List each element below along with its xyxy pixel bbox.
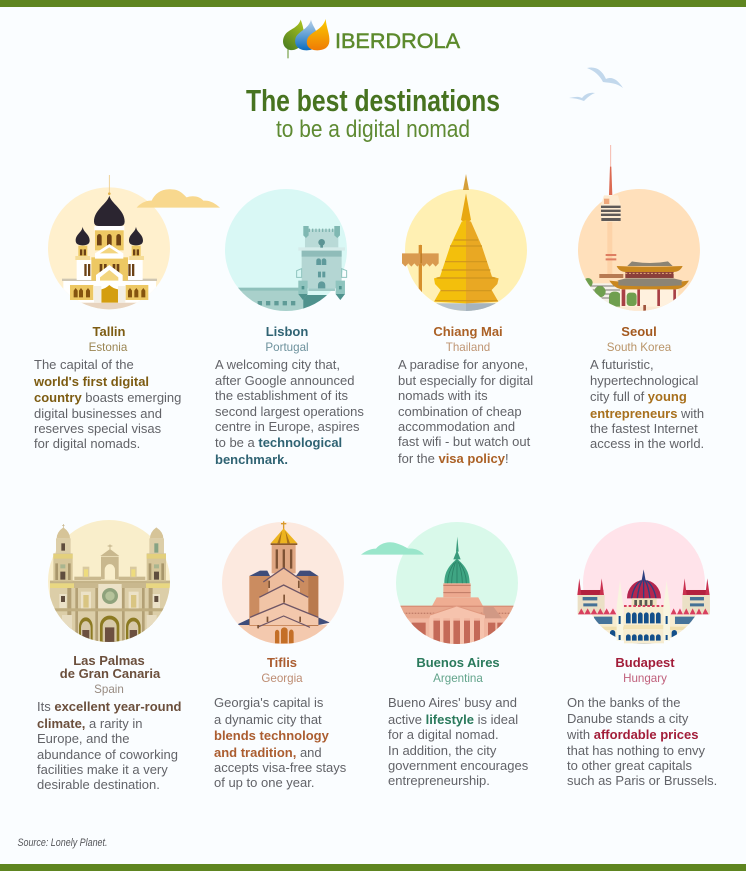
panel: Las Palmas [37, 520, 182, 792]
icon: birds [569, 67, 623, 101]
description: and tradition, [214, 745, 296, 760]
panel: Budapest [566, 522, 717, 788]
description: In addition, the city [388, 743, 497, 758]
logo: Iberdrola [283, 19, 460, 58]
description: young [648, 389, 687, 404]
description: to other great capitals [567, 758, 693, 773]
panel: Chiang Mai [398, 174, 533, 466]
description: Its [37, 699, 54, 714]
description: entrepreneurship. [388, 773, 490, 788]
illustration: Santa Ana cathedral [48, 520, 170, 644]
panel: Seoul [578, 145, 704, 451]
description: Georgia's capital is [214, 695, 324, 710]
description: climate, [37, 716, 85, 731]
description: that has nothing to envy [567, 743, 706, 758]
description: digital businesses and [34, 406, 162, 421]
description: of up to one year. [214, 775, 314, 790]
description: facilities make it a very [37, 762, 168, 777]
country: Thailand [446, 341, 490, 354]
illustration: Belem tower [225, 189, 347, 313]
city name line 2: de Gran Canaria [60, 666, 161, 681]
illustration: N Seoul Tower and temple [578, 145, 700, 312]
description: A paradise for anyone, [398, 357, 528, 372]
description: after Google announced [215, 373, 354, 388]
description: Danube stands a city [567, 711, 689, 726]
description: hypertechnological [590, 373, 699, 388]
description: a dynamic city that [214, 712, 322, 727]
description: boasts emerging [82, 390, 181, 405]
description: A futuristic, [590, 357, 654, 372]
panel: Buenos Aires [361, 522, 529, 788]
description: lifestyle is ideal [426, 712, 518, 727]
panel: Tiflis [214, 521, 347, 790]
description: for a digital nomad. [388, 727, 499, 742]
description: but especially for digital [398, 373, 533, 388]
illustration: National Congress [396, 522, 518, 645]
title [246, 83, 500, 143]
description: such as Paris or Brussels. [567, 773, 717, 788]
description: combination of cheap [398, 404, 522, 419]
description: desirable destination. [37, 777, 160, 792]
description: blends technology [214, 728, 330, 743]
description: technological [258, 435, 342, 450]
illustration: Hungarian Parliament [577, 522, 710, 645]
icon: green cloud [361, 542, 424, 555]
description: the establishment of its [215, 388, 348, 403]
city name: Budapest [615, 655, 675, 670]
city name: Chiang Mai [433, 324, 503, 339]
city name: Seoul [621, 324, 657, 339]
description: world's first digital [33, 374, 149, 389]
city name: Buenos Aires [416, 655, 500, 670]
description: and [296, 745, 322, 760]
icon: three leaves [283, 19, 329, 58]
description: country [34, 390, 82, 405]
country: South Korea [607, 341, 672, 354]
description: city full of [590, 389, 648, 404]
description: excellent year-round [54, 699, 182, 714]
country: Spain [94, 683, 124, 696]
wordmark: IBERDROLA [335, 30, 460, 53]
panel: Lisbon [215, 189, 364, 467]
country: Argentina [433, 672, 483, 685]
description: abundance of coworking [37, 747, 178, 762]
description: benchmark. [215, 452, 288, 467]
description: for digital nomads. [34, 436, 140, 451]
description: centre in Europe, aspires [215, 419, 360, 434]
description: active [388, 712, 426, 727]
description: second largest operations [215, 404, 364, 419]
city name: Tallin [93, 324, 126, 339]
illustration: golden stupa [402, 174, 527, 313]
description: nomads with its [398, 388, 488, 403]
description: Europe, and the [37, 731, 130, 746]
description: a rarity in [85, 716, 142, 731]
icon: yellow cloud [137, 189, 220, 208]
description: affordable prices [594, 727, 698, 742]
illustration: Sameba cathedral [222, 521, 344, 647]
description: On the banks of the [567, 695, 680, 710]
description: with [566, 727, 594, 742]
description: for the [398, 451, 438, 466]
description: reserves special visas [34, 421, 162, 436]
description: visa policy! [438, 451, 509, 466]
description: accepts visa-free stays [214, 760, 347, 775]
description: The capital of the [34, 357, 134, 372]
country: Georgia [261, 672, 303, 685]
description: to be a [215, 435, 258, 450]
description: A welcoming city that, [215, 357, 340, 372]
description: fast wifi - but watch out [398, 434, 531, 449]
description: accommodation and [398, 419, 515, 434]
description: access in the world. [590, 436, 704, 451]
top bar [0, 0, 746, 7]
bottom bar [0, 864, 746, 871]
description: entrepreneurs [590, 406, 677, 421]
description: the fastest Internet [590, 421, 698, 436]
illustration: Tallin cathedral [48, 175, 170, 313]
source note: Source: Lonely Planet. [18, 837, 108, 849]
description: Bueno Aires' busy and [388, 695, 517, 710]
description: government encourages [388, 758, 529, 773]
city name: Lisbon [266, 324, 308, 339]
country: Portugal [265, 341, 309, 354]
city name: Tiflis [267, 655, 297, 670]
city name: Las Palmas [73, 653, 145, 668]
panel: Tallin [33, 175, 220, 451]
heading: The best destinations [246, 83, 500, 118]
description: with [677, 406, 704, 421]
subheading: to be a digital nomad [276, 116, 470, 143]
country: Hungary [623, 672, 667, 685]
country: Estonia [89, 341, 128, 354]
